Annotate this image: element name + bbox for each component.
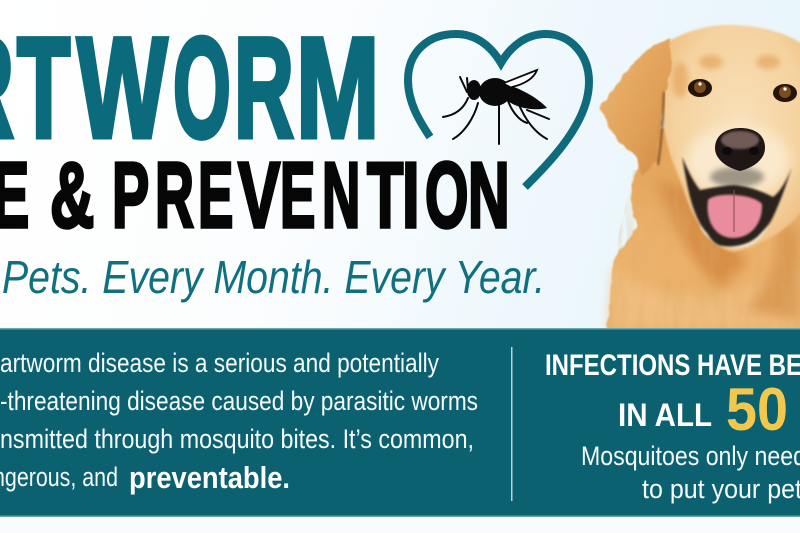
tagline: Pets. Every Month. Every Year. [2,251,545,303]
mosquito note [581,441,800,504]
icon: mosquito [443,70,549,144]
title line 2: T [367,142,403,247]
title line 2: & [50,143,94,247]
dog chin [700,226,768,248]
infection heading [545,349,800,433]
title line 1 [0,7,379,168]
title line 1: R [234,7,294,168]
icon: heart outline [408,34,589,187]
divider [511,347,512,501]
illustration: golden retriever [600,25,800,335]
description text: preventable. [129,460,290,495]
title line 2: E [280,143,315,248]
description text [0,348,478,495]
statistic: 50: 50 [726,376,788,443]
dog nose [715,128,765,171]
title line 2: E [198,143,233,248]
dog ear [600,37,672,177]
dog head [660,25,800,252]
description text: nsmitted through mosquito bites. It’s common, [0,424,474,454]
title line 2: P [112,145,149,248]
title line 2 [0,142,510,248]
title line 2: V [238,143,280,247]
dog tongue [708,195,762,238]
dog body fur [607,130,800,335]
panel: teal information band [0,328,800,517]
dog mouth [682,157,792,246]
title line 2: R [155,144,194,248]
description text: -threatening disease caused by parasitic worms [0,386,478,416]
dog brow patches [672,55,780,98]
dog fur texture [618,170,705,250]
dog muzzle [686,124,790,196]
infection heading: IN ALL [618,397,712,433]
title line 1: O [173,9,231,168]
dog muzzle grey [710,167,764,187]
dog eyes [688,79,797,102]
title line 2: N [468,144,510,247]
title line 2: O [425,145,468,248]
title line 2: N [322,143,360,248]
title line 1: T [17,9,70,168]
title line 1: M [296,8,379,168]
bottom strip [0,517,800,533]
description text: artworm disease is a serious and potentially [0,348,439,378]
title line 2: I [402,143,420,247]
title line 1: W [77,8,168,168]
